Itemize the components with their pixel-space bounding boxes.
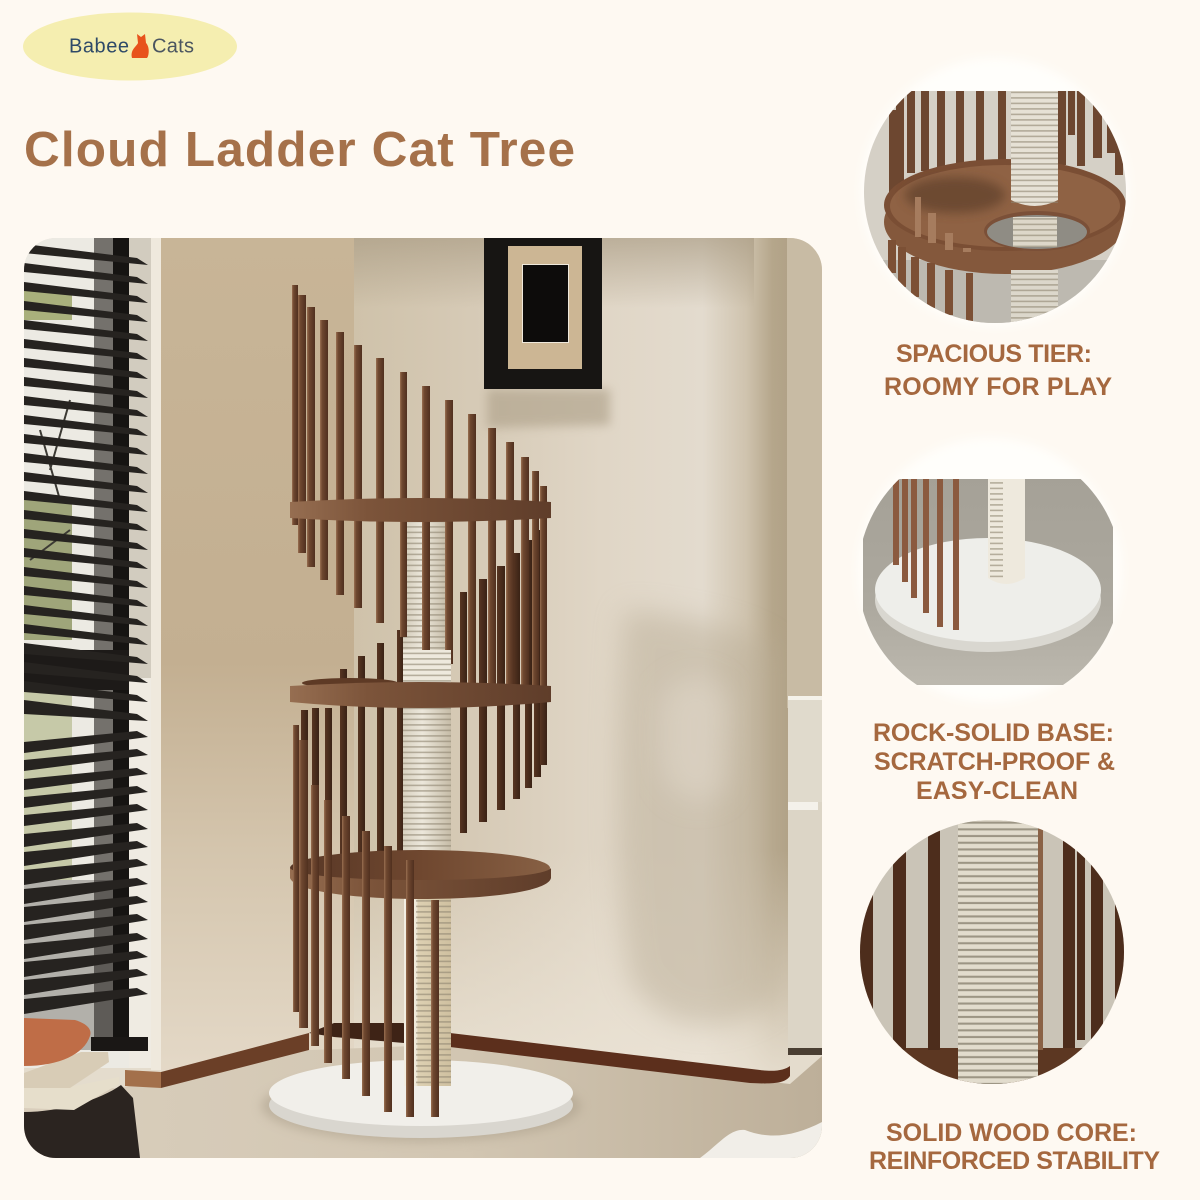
post <box>988 478 1025 584</box>
lower poles <box>888 240 973 323</box>
post <box>1011 91 1058 206</box>
poles <box>893 479 959 630</box>
tier 1 <box>290 498 551 522</box>
tier 3 <box>290 850 551 899</box>
detail caption: spacious tier: SPACIOUS TIER: <box>896 340 1092 368</box>
lower poles <box>293 725 439 1117</box>
cat tree <box>261 285 581 1142</box>
title: Cloud Ladder Cat Tree <box>24 122 575 177</box>
logo: Babee <box>69 36 129 58</box>
upper poles <box>292 285 547 690</box>
logo: Cats <box>152 36 194 58</box>
wall <box>24 238 822 1158</box>
back poles <box>301 510 547 860</box>
detail caption: base: EASY-CLEAN <box>916 777 1078 805</box>
sofa <box>788 696 822 1055</box>
panel: main photo <box>24 238 822 1158</box>
detail caption: core: REINFORCED STABILITY <box>869 1147 1160 1175</box>
hole <box>984 211 1090 251</box>
books, bowl and stool <box>24 1018 140 1158</box>
panel: detail circle, spacious tier <box>860 58 1130 330</box>
skirting <box>125 1023 790 1088</box>
detail caption: spacious tier <box>884 340 1112 401</box>
tier <box>884 213 1124 274</box>
logo <box>23 12 237 80</box>
base <box>261 1060 581 1142</box>
post <box>958 820 1038 1086</box>
detail caption: core <box>869 1119 1160 1175</box>
detail caption: spacious tier: ROOMY FOR PLAY <box>884 373 1112 401</box>
panel: detail circle, base <box>858 438 1122 702</box>
panel: detail circle, core <box>858 818 1128 1088</box>
picture frame <box>484 238 602 389</box>
detail caption: base <box>873 719 1115 805</box>
tier 2 <box>290 650 551 708</box>
detail caption: base: ROCK-SOLID BASE: <box>873 719 1114 747</box>
back poles <box>889 91 1123 192</box>
window with blinds <box>24 238 161 1070</box>
detail caption: core: SOLID WOOD CORE: <box>886 1119 1137 1147</box>
floor <box>24 1045 822 1158</box>
rug <box>700 1122 822 1158</box>
pegs <box>915 197 971 252</box>
post <box>403 520 451 1086</box>
detail caption: base: SCRATCH-PROOF & <box>874 748 1115 776</box>
icon: cat <box>132 34 149 58</box>
